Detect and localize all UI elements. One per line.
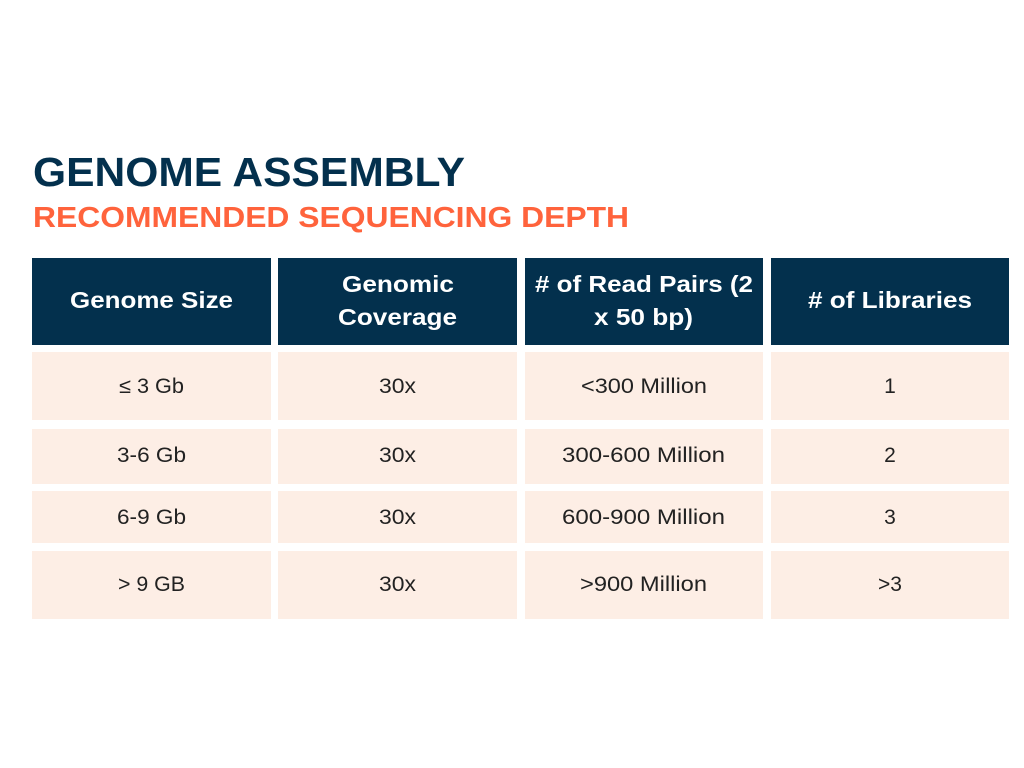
row: 6-9 Gb xyxy=(32,491,1009,543)
row: 3-6 Gb: 300-600 Million xyxy=(562,444,725,467)
row: 3-6 Gb xyxy=(32,429,1009,484)
header: genomic coverage: Genomic xyxy=(342,271,454,297)
row: up to 3 Gb: 1 xyxy=(884,375,896,398)
row: 3-6 Gb: 30x xyxy=(379,444,417,467)
header: read pairs: # of Read Pairs (2 xyxy=(535,271,753,297)
row: 3-6 Gb: 3-6 Gb xyxy=(117,444,186,467)
header: libraries xyxy=(771,258,1009,345)
row: over 9 GB: >3 xyxy=(878,573,902,596)
row: up to 3 Gb: 30x xyxy=(379,375,417,398)
header: libraries: # of Libraries xyxy=(808,287,972,313)
row: over 9 GB: > 9 GB xyxy=(118,573,185,596)
row: over 9 GB xyxy=(32,551,1009,619)
header: genome size xyxy=(32,258,271,345)
header: read pairs xyxy=(525,258,763,345)
row: over 9 GB: >900 Million xyxy=(580,573,707,596)
table xyxy=(32,258,1009,619)
row: up to 3 Gb xyxy=(32,352,1009,420)
row: over 9 GB: 30x xyxy=(379,573,417,596)
header: read pairs: x 50 bp) xyxy=(594,304,693,330)
row: 6-9 Gb: 600-900 Million xyxy=(562,506,725,529)
subtitle: RECOMMENDED SEQUENCING DEPTH xyxy=(33,202,629,234)
row: up to 3 Gb: ≤ 3 Gb xyxy=(119,375,184,398)
title: GENOME ASSEMBLY xyxy=(33,149,465,195)
header: genome size: Genome Size xyxy=(70,287,233,313)
row: 6-9 Gb: 6-9 Gb xyxy=(117,506,186,529)
header: genomic coverage xyxy=(278,258,517,345)
header: genomic coverage: Coverage xyxy=(338,304,457,330)
row: 3-6 Gb: 2 xyxy=(884,444,896,467)
row: up to 3 Gb: <300 Million xyxy=(581,375,707,398)
row: 6-9 Gb: 30x xyxy=(379,506,417,529)
row: 6-9 Gb: 3 xyxy=(884,506,896,529)
